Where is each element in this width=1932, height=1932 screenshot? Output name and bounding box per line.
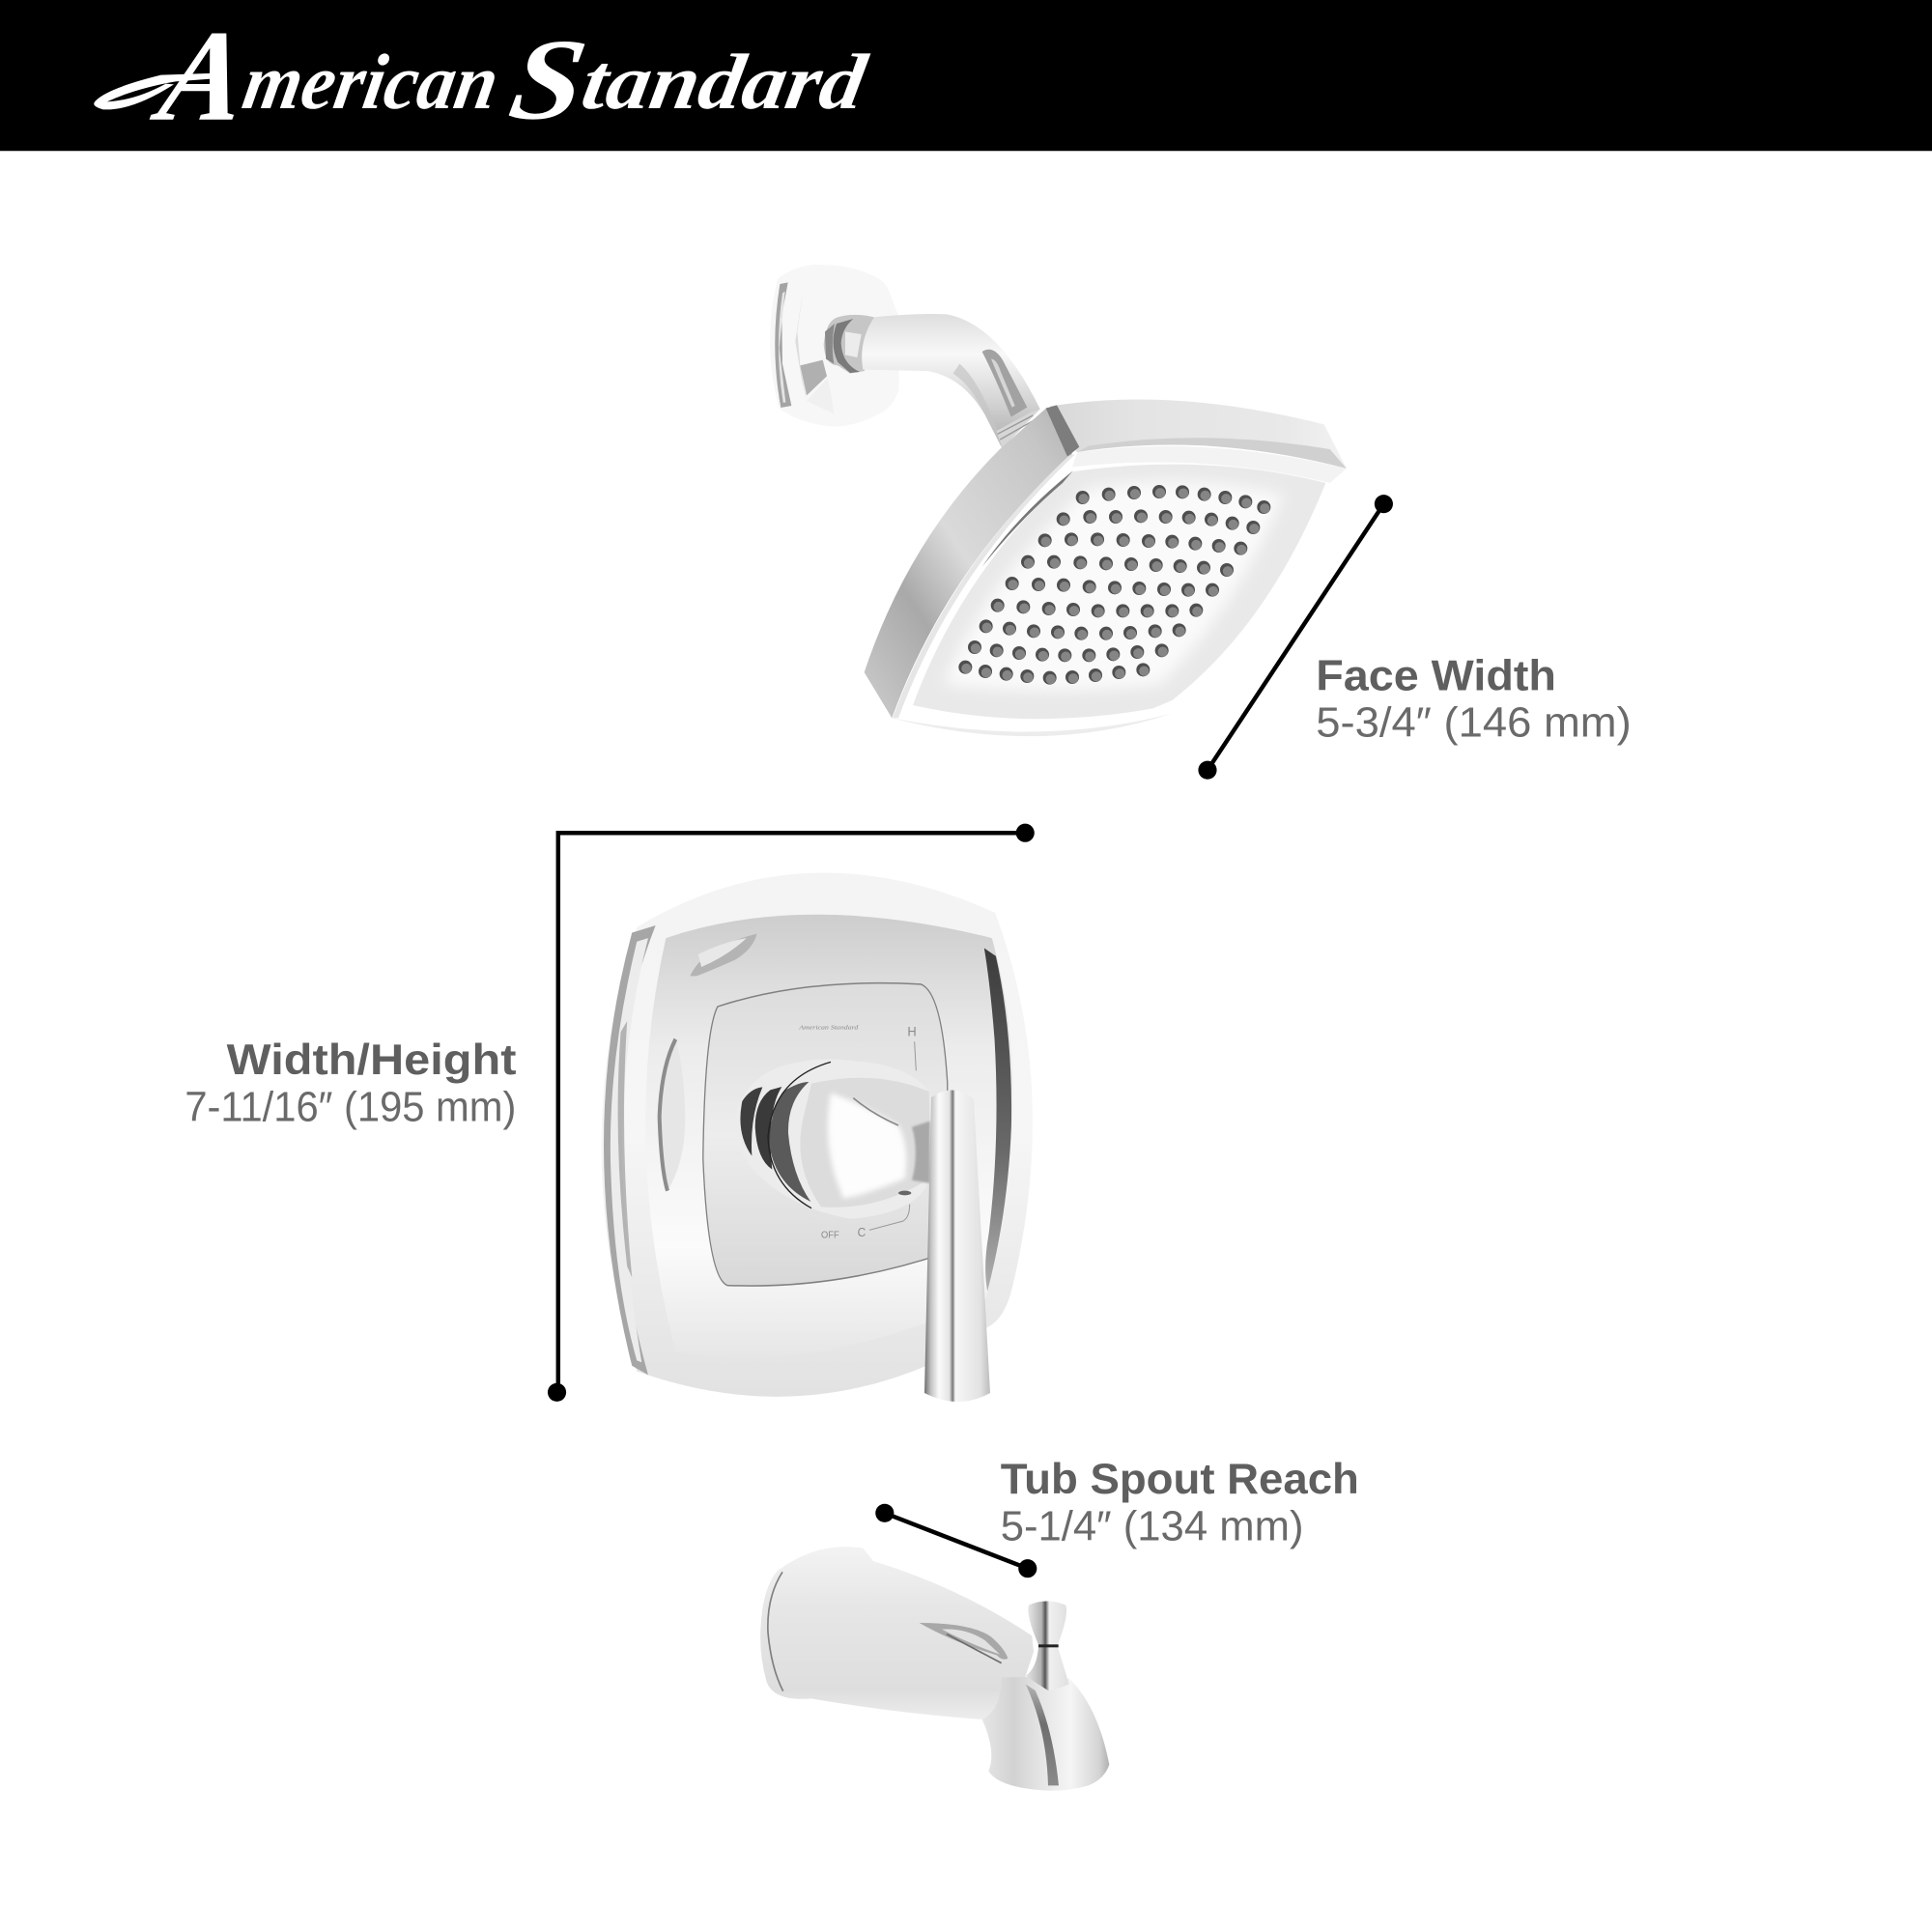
logo wordmark: tandard (576, 39, 874, 126)
left edge strips (604, 925, 656, 1375)
inner plate (645, 915, 1013, 1358)
label: face width: 5-3/4″ (146 mm) (1316, 700, 1632, 747)
label: width and height (185, 1037, 517, 1131)
top band (1050, 400, 1347, 469)
label: face width (1316, 652, 1632, 747)
valve trim plate with lever handle (601, 873, 1033, 1402)
dimension line: tub spout reach (875, 1504, 1037, 1577)
flange facet (800, 360, 827, 395)
right dark crescent (984, 949, 1011, 1292)
label: width and height: Width/Height (227, 1037, 517, 1084)
left band (865, 408, 1072, 718)
wall flange and arm (770, 265, 1040, 448)
engraved marks (798, 1023, 917, 1240)
label: tub spout reach: 5-1/4″ (134 mm) (1001, 1503, 1303, 1549)
logo wordmark: S (501, 15, 595, 144)
label: tub spout reach: Tub Spout Reach (1001, 1456, 1359, 1503)
nozzle dark stripe (1026, 1684, 1059, 1785)
dimension line: face width (1198, 495, 1393, 780)
tub spout (760, 1547, 1109, 1791)
spout body (760, 1547, 1034, 1726)
face rim (1072, 446, 1347, 483)
knob body (800, 1078, 930, 1208)
shower head with arm and flange (770, 265, 1347, 736)
upper-left reflection (690, 934, 757, 976)
end ring (768, 1572, 783, 1691)
logo wordmark: A (143, 5, 259, 148)
arm (862, 314, 1040, 448)
dark corner bar (1046, 405, 1079, 457)
flange dark strip (775, 282, 791, 408)
dimension line: width and height (548, 824, 1035, 1402)
inner plane (913, 465, 1325, 719)
label: tub spout reach (1001, 1456, 1359, 1549)
face (892, 445, 1347, 736)
engraved marks: C (858, 1225, 867, 1239)
label: face width: Face Width (1316, 652, 1556, 699)
label: width and height: 7-11/16″ (195 mm) (185, 1085, 516, 1131)
nozzle (982, 1677, 1109, 1791)
diverter knob (1028, 1601, 1066, 1645)
engraved marks: American Standard (798, 1024, 859, 1031)
logo swash (94, 72, 225, 109)
threads (997, 409, 1040, 448)
logo wordmark (143, 5, 880, 148)
knob dark rings (740, 1087, 762, 1156)
header bar (0, 0, 1932, 151)
bottom edge shading (892, 713, 1172, 736)
logo: American Standard (94, 5, 880, 148)
wall flange (770, 265, 899, 427)
engraved marks: H (907, 1023, 917, 1038)
inner square (703, 983, 948, 1286)
knob silhouette (734, 1059, 929, 1219)
head (865, 400, 1347, 736)
spray holes (965, 492, 1264, 679)
logo wordmark: merican (237, 39, 505, 126)
inner highlight line (982, 470, 1073, 567)
diverter stem (1026, 1647, 1069, 1690)
outer plate (601, 873, 1033, 1397)
lever (924, 1090, 990, 1402)
collar (824, 315, 874, 374)
left oval recess (660, 1039, 685, 1191)
top slot reflection (920, 1623, 1008, 1660)
engraved marks: OFF (821, 1230, 839, 1240)
